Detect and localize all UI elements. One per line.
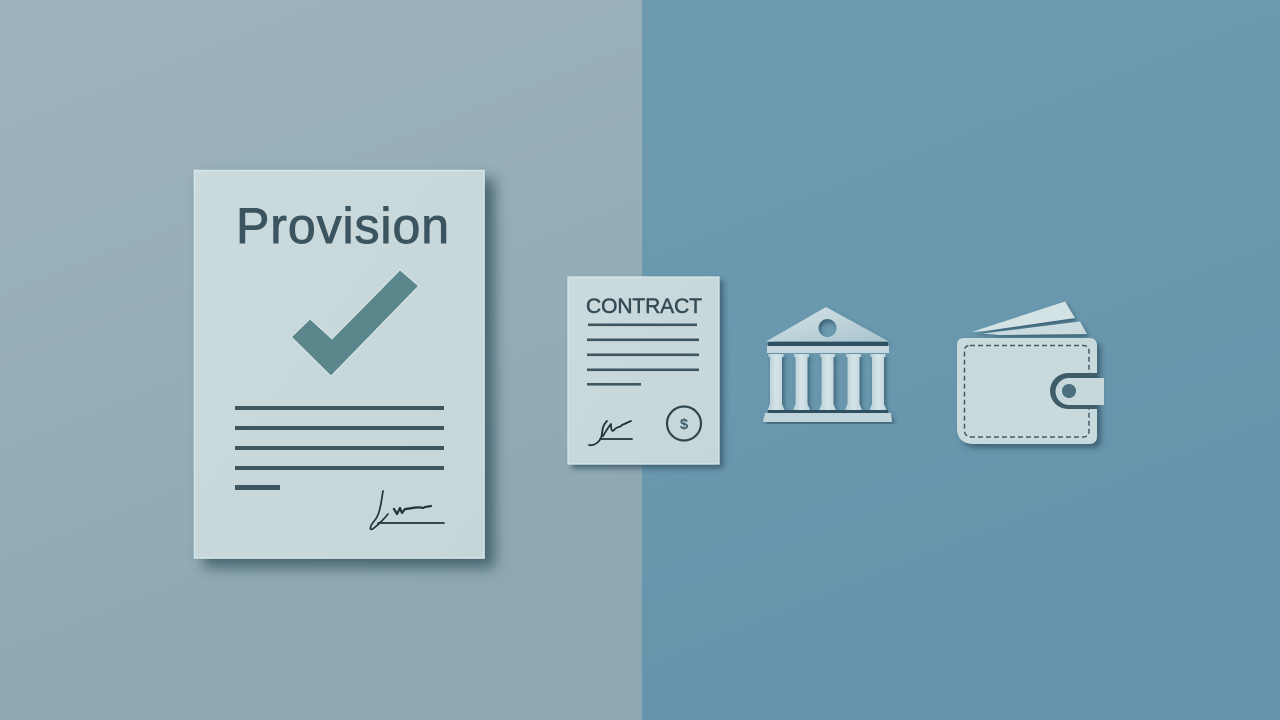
icon: check mark: [292, 270, 418, 376]
large provision document: [194, 170, 484, 558]
wallet clasp: [1050, 373, 1104, 409]
bank dark band above base: [768, 410, 888, 413]
wallet stitching: [964, 346, 1089, 437]
background: left panel: [0, 0, 642, 720]
heading: CONTRACT: CONTRACT: [586, 295, 702, 318]
contract signature: [589, 421, 632, 445]
bank columns: [768, 354, 886, 410]
heading: Provision: Provision: [236, 198, 449, 254]
wallet front bill: [983, 322, 1087, 335]
document sheet: [194, 170, 484, 558]
background: right panel: [642, 0, 1280, 720]
small contract document: [568, 277, 719, 464]
bank roof with round window: [766, 307, 889, 342]
icon: wallet: [957, 302, 1104, 444]
contract text lines: [587, 324, 699, 386]
wallet body: [957, 338, 1097, 444]
bank base: [763, 413, 892, 422]
contract sheet: [568, 277, 719, 464]
icon: dollar seal: $: [680, 416, 689, 433]
signature: [370, 491, 444, 529]
icon: bank building: [763, 307, 892, 422]
bank beam: [767, 346, 889, 353]
wallet back bill: [972, 302, 1075, 332]
bank dark band under roof: [768, 342, 888, 346]
icon: dollar seal: [667, 406, 701, 440]
text lines: [235, 406, 444, 490]
